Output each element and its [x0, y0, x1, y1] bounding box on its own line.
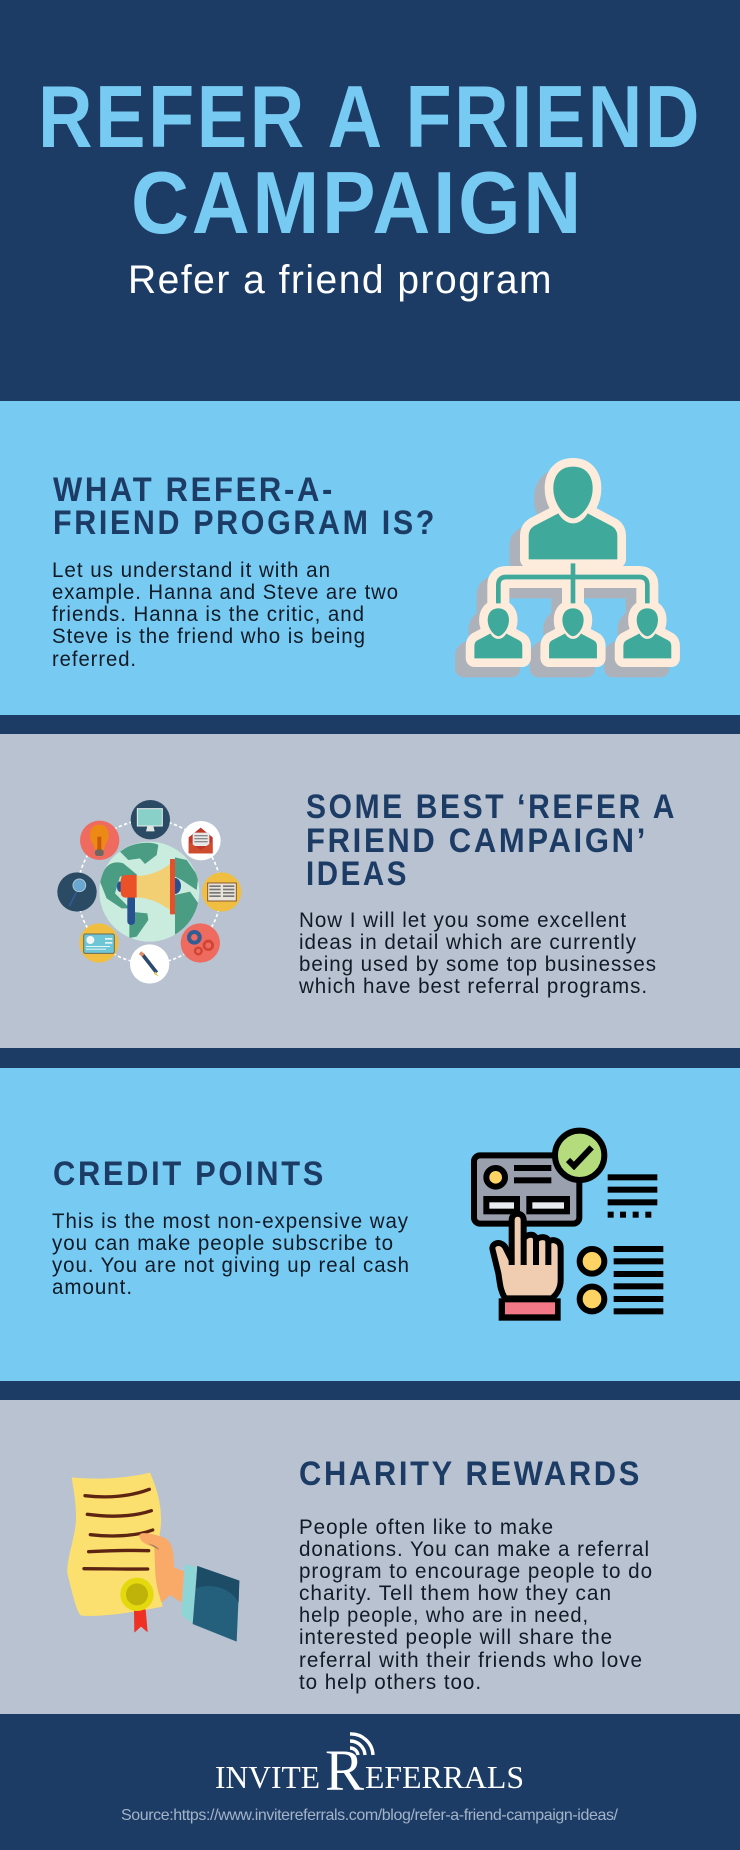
title: CAMPAIGN [131, 153, 584, 252]
body text: This is the most non-expensive way [52, 1209, 409, 1233]
heading: CREDIT POINTS [53, 1155, 326, 1193]
body text: example. Hanna and Steve are two [52, 580, 399, 604]
logo: Invite Referrals: R [325, 1738, 364, 1803]
heading [306, 788, 677, 893]
body text [52, 1209, 410, 1299]
body text: which have best referral programs. [298, 974, 648, 998]
icon: referral hierarchy [464, 467, 671, 669]
icon ring [57, 800, 241, 984]
panel: footer [0, 1714, 740, 1850]
body text: People often like to make [299, 1515, 554, 1539]
logo: Invite Referrals: INVITE [215, 1759, 320, 1795]
panel: charity rewards [0, 1400, 740, 1714]
panel: what refer-a-friend program is [0, 401, 740, 715]
heading: FRIEND CAMPAIGN’ [306, 822, 648, 860]
subtitle: Refer a friend program [128, 258, 553, 302]
body text: donations. You can make a referral [299, 1537, 650, 1561]
body text: Steve is the friend who is being [52, 624, 366, 648]
body text: Let us understand it with an [52, 558, 331, 582]
icon: megaphone and globe with circle of icons [57, 800, 241, 984]
body text: amount. [52, 1275, 133, 1299]
body text: referral with their friends who love [299, 1648, 643, 1672]
body text: interested people will share the [299, 1625, 613, 1649]
body text: you can make people subscribe to [52, 1231, 394, 1255]
panel: credit points [0, 1068, 740, 1381]
body text: Now I will let you some excellent [299, 908, 627, 932]
megaphone [117, 859, 181, 925]
icon: certificate held by a hand [67, 1473, 239, 1642]
body text: being used by some top businesses [299, 952, 657, 976]
panel: some best ideas [0, 734, 740, 1048]
heading: CHARITY REWARDS [299, 1455, 642, 1493]
body text: to help others too. [299, 1670, 482, 1694]
heading: FRIEND PROGRAM IS? [53, 504, 437, 542]
heading: IDEAS [306, 855, 409, 893]
body text [299, 1515, 653, 1694]
body text [52, 558, 399, 671]
panel: header [0, 0, 740, 401]
body text: you. You are not giving up real cash [52, 1253, 410, 1277]
body text [298, 908, 657, 998]
heading: SOME BEST ‘REFER A [306, 788, 677, 826]
title [38, 67, 702, 252]
body text: help people, who are in need, [299, 1603, 589, 1627]
heading [53, 471, 437, 542]
body text: friends. Hanna is the critic, and [52, 602, 365, 626]
logo: Invite Referrals [215, 1734, 524, 1803]
body text: ideas in detail which are currently [299, 930, 637, 954]
icon: card with checkmark and pointing hand [474, 1131, 663, 1321]
heading: WHAT REFER-A- [53, 471, 335, 509]
body text: referred. [52, 647, 137, 671]
source line: Source:https://www.invitereferrals.com/blog/refer-a-friend-campaign-ideas/ [121, 1807, 619, 1824]
body text: charity. Tell them how they can [299, 1581, 612, 1605]
logo: Invite Referrals: EFERRALS [365, 1759, 524, 1795]
body text: program to encourage people to do [299, 1559, 653, 1583]
